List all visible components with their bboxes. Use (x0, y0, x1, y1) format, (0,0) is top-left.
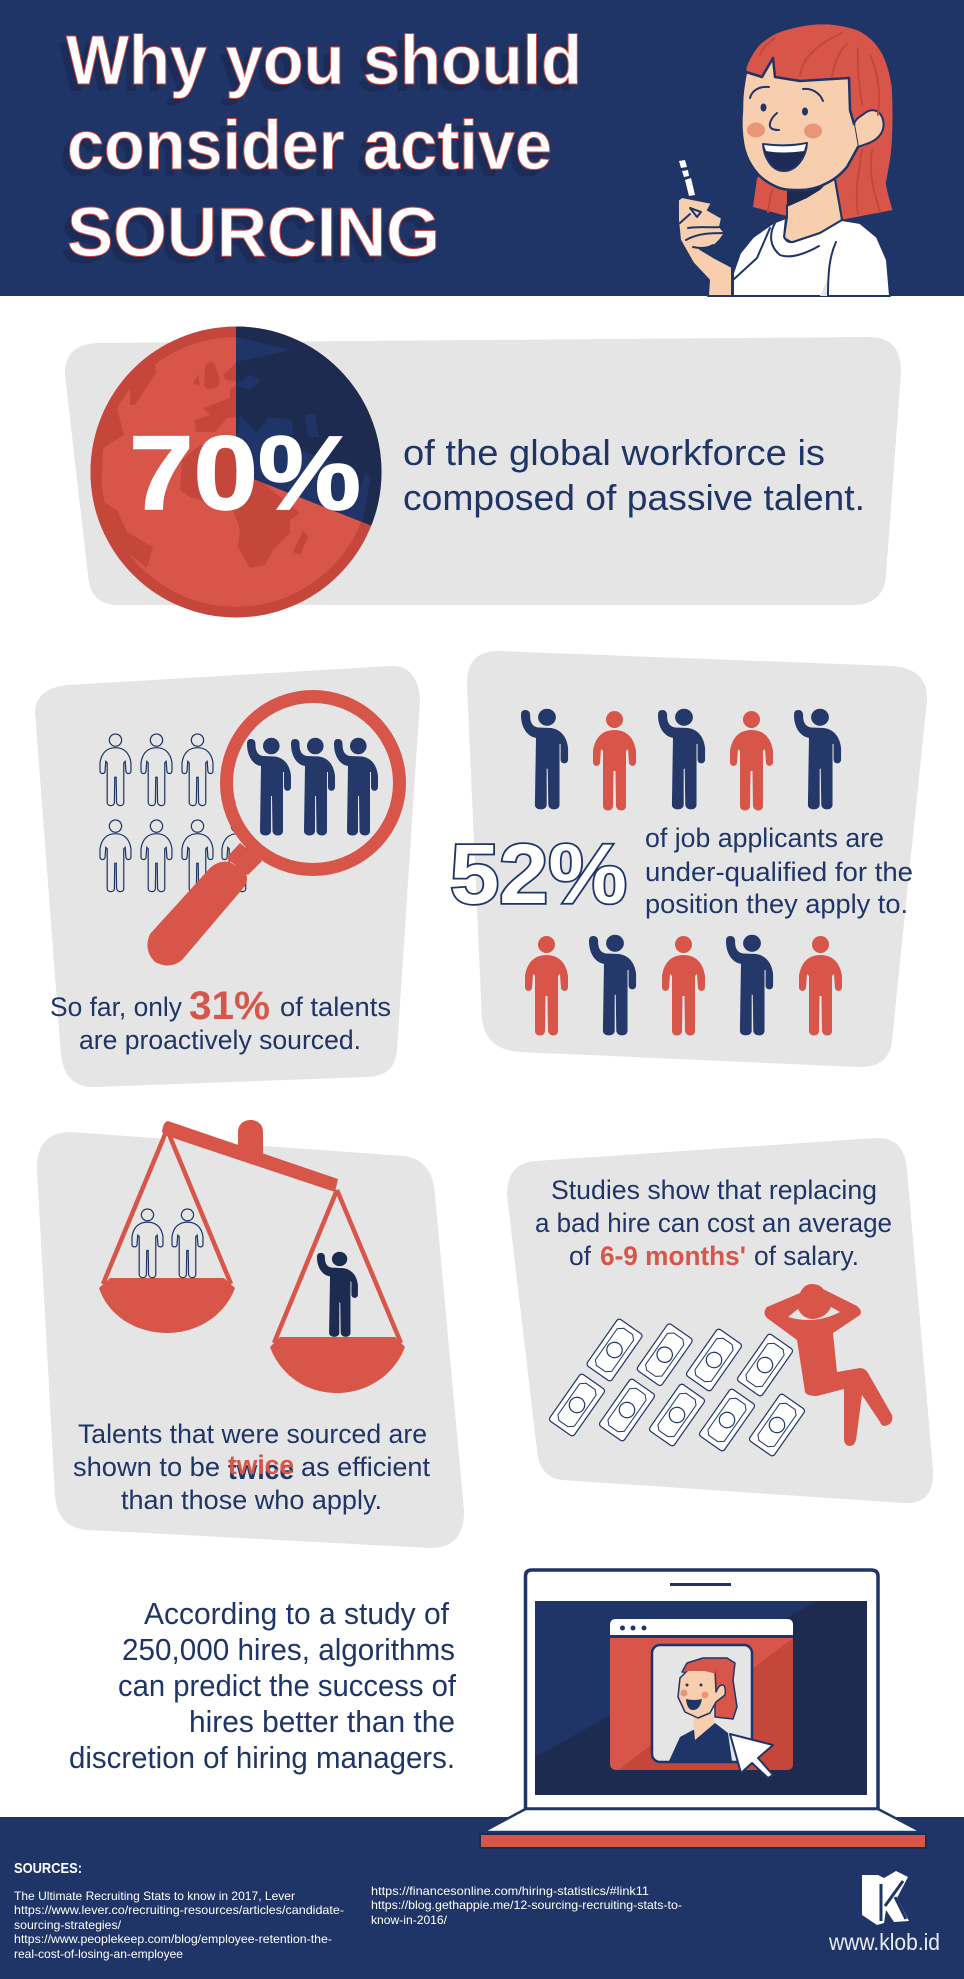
logo: klob (828, 1871, 940, 1955)
hand (678, 197, 732, 296)
icon: cursor (730, 1734, 773, 1778)
text: replacing a bad hire: of salary. (754, 1241, 859, 1271)
outlined people on left pan (132, 1209, 203, 1278)
sources column 2: know-in-2016/ (371, 1913, 448, 1927)
profile card (652, 1645, 752, 1762)
text: efficient: Talents that were sourced are (78, 1419, 427, 1449)
icon: balance scale (99, 1120, 405, 1393)
header banner (0, 0, 964, 296)
eyes (760, 104, 766, 112)
browser window (610, 1619, 793, 1778)
text: algorithms study: can predict the success of (118, 1668, 456, 1703)
panel: under-qualified applicants (450, 651, 927, 1067)
text: applicants: of job applicants are (645, 823, 884, 853)
cheeks (747, 122, 765, 138)
face (741, 58, 858, 190)
illustration: laptop (480, 1570, 926, 1848)
laptop base (480, 1809, 926, 1848)
text: 31% sourced: of talents (280, 992, 391, 1022)
icon: magnifying glass (147, 696, 400, 966)
text: efficient: twice (228, 1450, 294, 1480)
title: consider active (60, 113, 545, 191)
text: applicants (645, 823, 913, 919)
text: 31% sourced: 31% (189, 984, 270, 1028)
stat: 52%: 52% (450, 827, 627, 921)
hair strands (760, 33, 880, 214)
sources column 1: sourcing-strategies/ (14, 1918, 122, 1932)
people row top (521, 709, 841, 810)
text: applicants: under-qualified for the (645, 857, 913, 887)
text: 31% sourced (50, 984, 391, 1055)
title (59, 21, 582, 278)
sources: SOURCES: (14, 1860, 82, 1877)
text: passive talent: of the global workforce is (403, 432, 825, 473)
text: replacing a bad hire: Studies show that replacing (551, 1175, 877, 1205)
text: efficient: than those who apply. (121, 1485, 382, 1515)
mouth (763, 143, 807, 171)
text: passive talent (403, 432, 865, 518)
text: algorithms study: discretion of hiring managers. (69, 1740, 455, 1775)
neck (784, 175, 842, 242)
text: replacing a bad hire (535, 1175, 892, 1271)
sources column 1: The Ultimate Recruiting Stats to know in 2017, Lever (14, 1889, 295, 1903)
stat: 70%: 70% (129, 415, 361, 532)
sources (14, 1860, 682, 1961)
text: 31% sourced: are proactively sourced. (79, 1025, 361, 1055)
text: passive talent: composed of passive talent. (403, 477, 865, 518)
sources column 1: https://www.lever.co/recruiting-resources/articles/candidate- (14, 1903, 344, 1917)
sources column 2 (371, 1884, 682, 1927)
sources column 2: https://blog.gethappie.me/12-sourcing-recruiting-stats-to- (371, 1898, 682, 1912)
text: replacing a bad hire: a bad hire can cost an average (535, 1208, 892, 1238)
panel: twice as efficient (37, 1120, 464, 1548)
outlined people (100, 734, 253, 892)
text: efficient: shown to be (73, 1452, 220, 1482)
icon: banknotes (548, 1318, 806, 1457)
shirt (733, 218, 890, 296)
hair back (745, 23, 894, 221)
footer band (0, 1817, 964, 1979)
people row bottom (525, 935, 842, 1036)
title: Why you should (66, 21, 582, 99)
text: algorithms study: 250,000 hires, algorithms (122, 1632, 455, 1667)
text: 31% sourced: So far, only (50, 992, 182, 1022)
logo: klob: www.klob.id (828, 1929, 940, 1955)
screen (535, 1601, 867, 1795)
text: replacing a bad hire: of (569, 1241, 591, 1271)
title: SOURCING (60, 200, 433, 278)
text: efficient: twice (228, 1455, 294, 1485)
sources column 1: real-cost-of-losing-an-employee (14, 1947, 183, 1961)
pen (676, 143, 695, 198)
sources column 1: https://www.peoplekeep.com/blog/employee-retention-the- (14, 1932, 332, 1946)
panel: proactively sourced (35, 666, 420, 1087)
text: applicants: position they apply to. (645, 889, 908, 919)
text: algorithms study: According to a study of (144, 1596, 449, 1631)
text: algorithms study: hires better than the (189, 1704, 455, 1739)
title: SOURCING (67, 193, 440, 271)
title: Why you should (59, 28, 575, 106)
illustration: woman holding a pen (676, 23, 894, 296)
text: efficient: as efficient (301, 1452, 430, 1482)
selected people (247, 738, 378, 836)
panel: cost of bad hire (507, 1138, 933, 1503)
ear (854, 110, 884, 147)
text: replacing a bad hire: 6-9 months' (600, 1241, 746, 1271)
sources column 1 (14, 1889, 344, 1961)
person on right pan (317, 1252, 358, 1337)
sources column 2: https://financesonline.com/hiring-statistics/#link11 (371, 1884, 649, 1898)
text: efficient (73, 1419, 430, 1515)
globe pie chart (90, 326, 382, 618)
text: algorithms study (69, 1596, 456, 1775)
title: consider active (67, 106, 552, 184)
panel: global workforce (60, 320, 901, 620)
icon: relaxing person (764, 1284, 892, 1446)
